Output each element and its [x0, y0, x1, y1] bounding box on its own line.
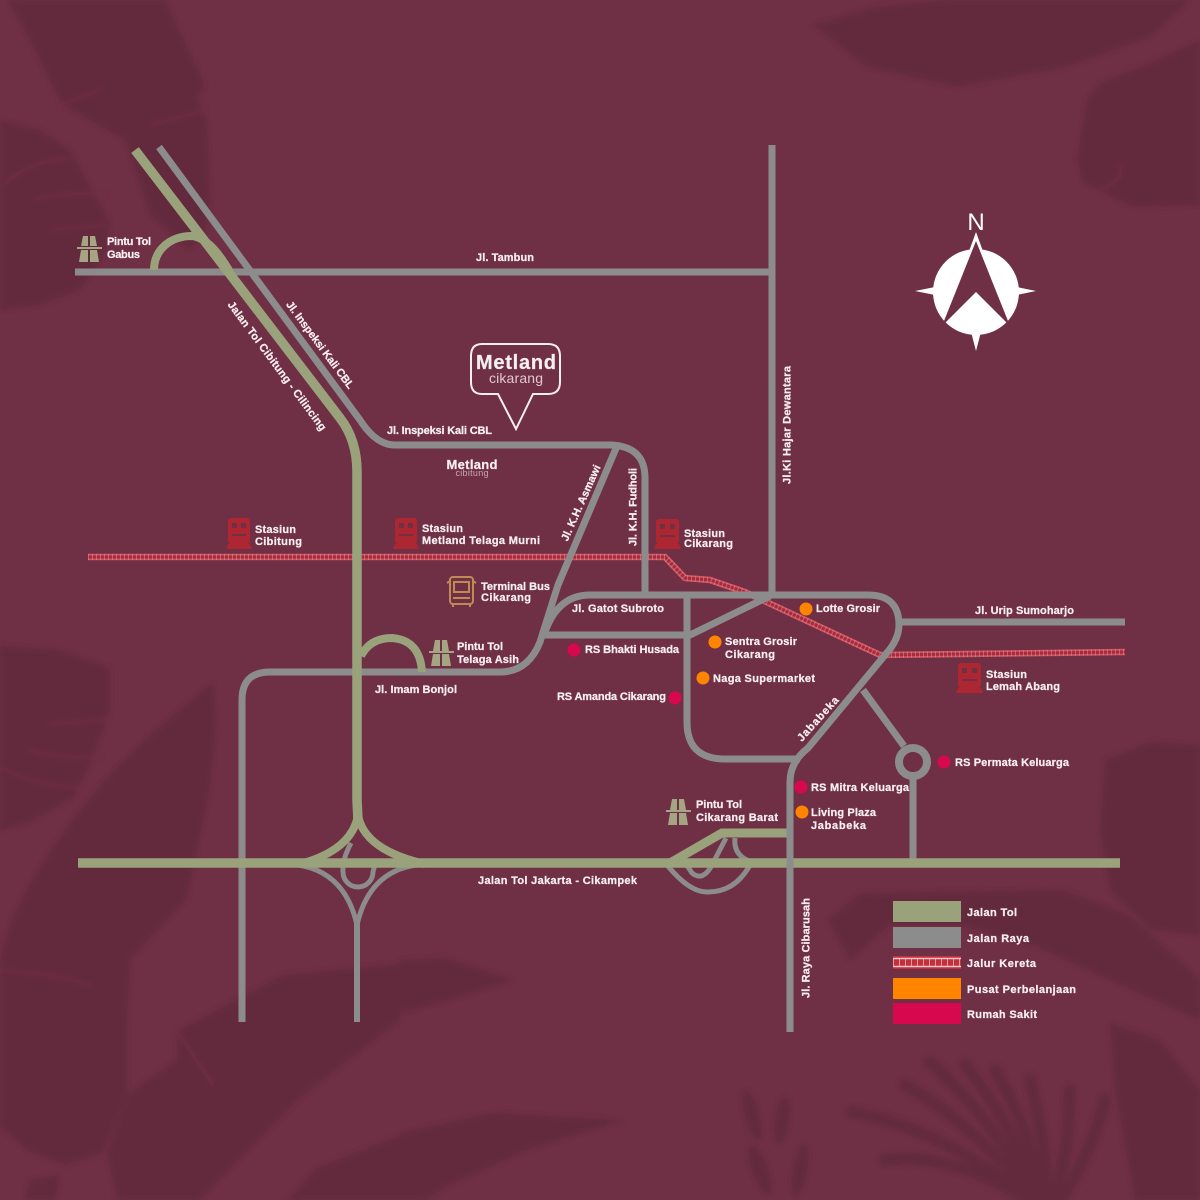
road: Urip Sumoharjo [899, 618, 1125, 626]
map labels: Stasiun [255, 524, 296, 536]
map labels: Stasiun [684, 528, 725, 540]
icon: train Metland Telaga Murni [393, 518, 419, 549]
icon: toll gate Gabus [77, 236, 102, 262]
map labels: Gabus [107, 249, 140, 261]
road: branch to roundabout [863, 690, 904, 746]
map labels: Cikarang Barat [696, 812, 778, 824]
map labels: Jl.Ki Hajar Dewantara [782, 365, 794, 484]
road: Jl. Ki Hajar Dewantara [768, 145, 776, 597]
toll: Gabus ramp [154, 236, 230, 272]
road: Jl. K.H. Asmawi and Imam Bonjol [242, 446, 617, 1022]
map labels: Stasiun [986, 669, 1027, 681]
road: inner loop [687, 597, 800, 759]
legend: Pusat Perbelanjaan [967, 984, 1076, 996]
legend: Jalan Tol [967, 907, 1017, 919]
map labels: Jl. Tambun [476, 252, 534, 264]
road: Jl. Raya Cibarusah crossing [786, 826, 794, 880]
road: roundabout to toll [910, 776, 916, 863]
legend: Rumah Sakit [967, 1009, 1037, 1021]
legend: Jalan Raya [967, 933, 1030, 945]
icon: Metland Cikarang marker: cikarang [489, 370, 543, 386]
label: Metland Cibitung: cibitung [456, 468, 488, 478]
road: Jl. Inspeksi Kali CBL [159, 147, 645, 597]
map labels: RS Mitra Keluarga [811, 782, 910, 794]
map labels: Jl. K.H. Asmawi [559, 463, 604, 543]
legend: Jalur Kereta [967, 958, 1037, 970]
map labels: Jl. Inspeksi Kali CBL [283, 299, 356, 392]
icon: toll gate Cikarang Barat [666, 799, 691, 825]
map labels: Jalan Tol Jakarta - Cikampek [478, 875, 638, 887]
map labels: Lotte Grosir [816, 603, 881, 615]
icon: train Cikarang [654, 519, 681, 549]
toll: Telaga Asih ramp [361, 638, 422, 672]
roundabout [899, 748, 927, 776]
map labels: Metland Telaga Murni [422, 535, 540, 547]
map labels: Cikarang [481, 592, 531, 604]
map labels: Telaga Asih [457, 654, 519, 666]
road network [75, 145, 1125, 1032]
map labels: Jl. Raya Cibarusah [800, 898, 812, 998]
Cikarang Barat ramps [667, 838, 752, 892]
icon: compass [915, 209, 1036, 351]
icon: train Cibitung [226, 518, 252, 549]
icon: toll gate Telaga Asih [429, 640, 454, 666]
map labels: Stasiun [422, 523, 463, 535]
icon: Metland Cikarang marker [471, 344, 560, 429]
icon: compass: N [967, 209, 985, 236]
road: Jl. Tambun [75, 268, 772, 276]
map labels: Jababeka [795, 694, 842, 744]
map labels: Jalan Tol Cibitung - Cilincing [225, 299, 328, 433]
toll: Jakarta - Cikampek [78, 858, 1120, 868]
map labels: Pintu Tol [457, 641, 503, 653]
map labels: Jl. Imam Bonjol [375, 684, 457, 696]
map labels: Jababeka [811, 820, 867, 832]
legend [893, 901, 1076, 1024]
icon: Metland Cikarang marker: Metland [476, 352, 556, 374]
map labels: Living Plaza [811, 807, 877, 819]
map labels: RS Bhakti Husada [585, 644, 680, 656]
label: Metland Cibitung: Metland [446, 457, 498, 472]
map labels: Lemah Abang [986, 681, 1060, 693]
toll roads [78, 150, 1120, 864]
road: south cloverleaf stem [354, 920, 360, 1022]
railway line [88, 557, 1125, 655]
hospital markers [568, 644, 950, 794]
map labels: Jl. Inspeksi Kali CBL [387, 425, 492, 437]
map labels: Cibitung [255, 536, 302, 548]
map labels [107, 236, 1074, 998]
road: RS Bhakti connector [545, 596, 770, 635]
toll: Cibitung - Cilincing [135, 150, 358, 820]
icon: bus terminal [447, 577, 476, 607]
map labels: Jl. Gatot Subroto [572, 603, 664, 615]
icon: train Lemah Abang [956, 663, 983, 693]
map labels: RS Amanda Cikarang [557, 691, 666, 703]
toll: interchange curves [300, 815, 425, 864]
map labels: Cikarang [725, 649, 775, 661]
map labels: Jl. K.H. Fudholi [628, 468, 640, 546]
road: Jl. Gatot Subroto and Jababeka loop [545, 595, 899, 1032]
shopping markers [696, 602, 812, 818]
map labels: RS Permata Keluarga [955, 757, 1070, 769]
map labels: Pintu Tol [696, 799, 742, 811]
map labels: Naga Supermarket [713, 673, 815, 685]
map labels: Terminal Bus [481, 581, 550, 593]
map labels: Jl. Urip Sumoharjo [975, 605, 1074, 617]
toll: Cikarang Barat ramp [670, 833, 787, 863]
map labels: Sentra Grosir [725, 636, 798, 648]
map labels: Cikarang [684, 538, 733, 550]
cloverleaf ramps [298, 843, 416, 925]
map labels: Pintu Tol [107, 236, 151, 248]
